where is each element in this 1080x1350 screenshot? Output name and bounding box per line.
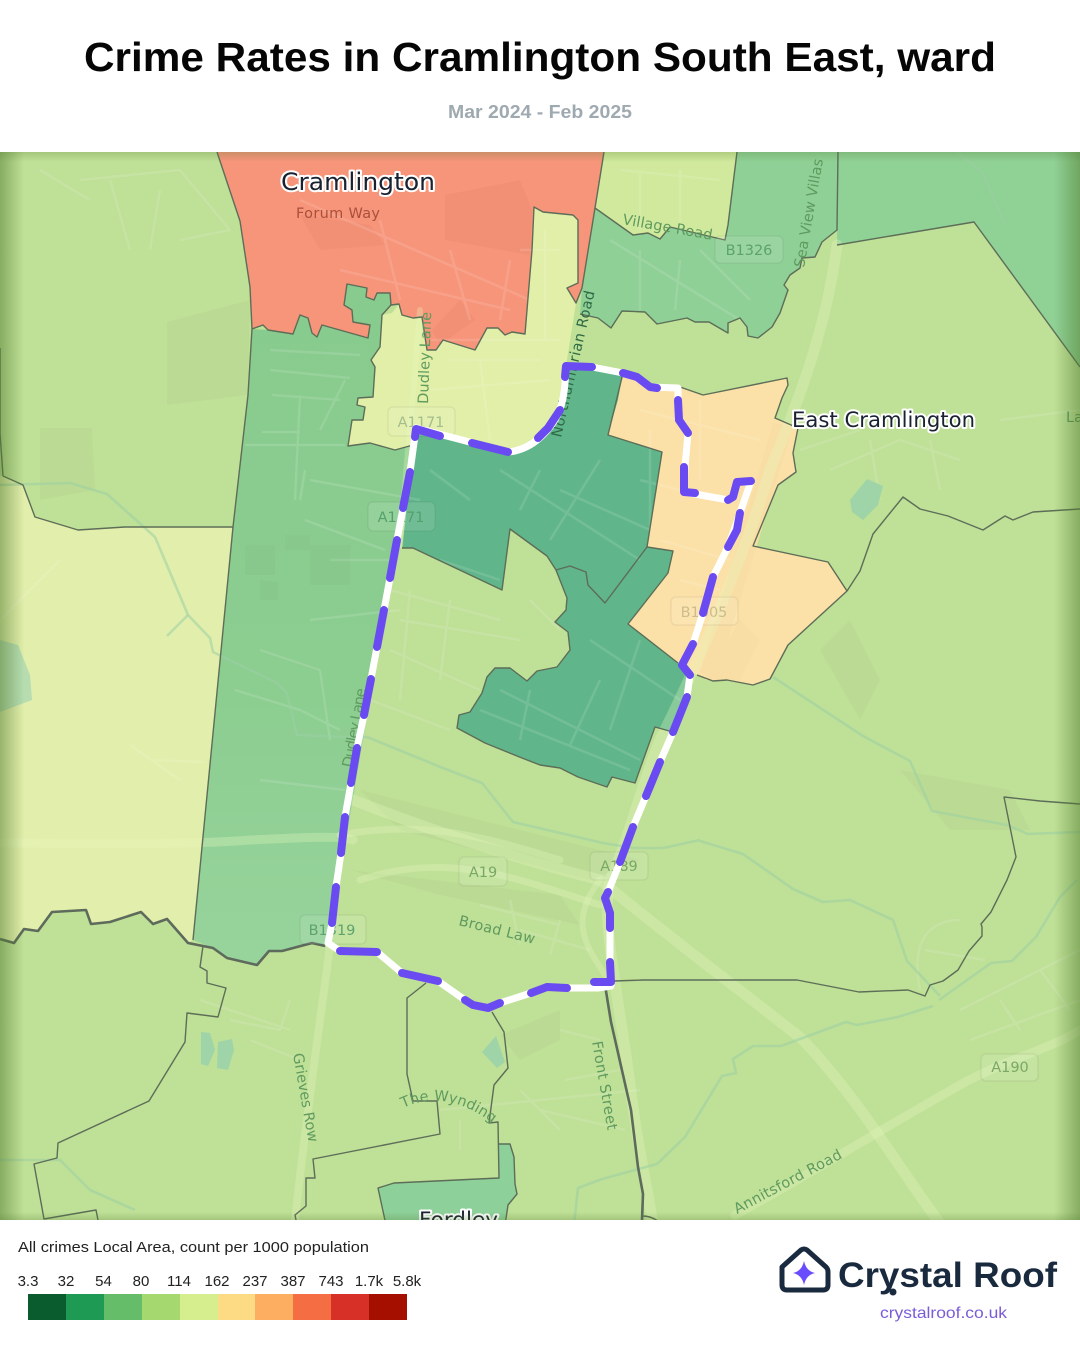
road shield labels: A1171 (378, 510, 424, 526)
road shield labels: B1326 (726, 243, 772, 259)
road names: Northumbrian Road (549, 289, 599, 439)
road shield labels: B1319 (309, 923, 355, 939)
road names: Forum Way (296, 206, 380, 222)
region: pale yellow west area (0, 476, 233, 943)
road names: Dudley Lane (416, 312, 435, 404)
footer panel (0, 1220, 1080, 1350)
legend tick labels: 114 (167, 1273, 191, 1290)
region: Cramlington red area (217, 152, 604, 350)
logo wordmark: Crystal Roof (838, 1256, 1057, 1295)
region: west green strip (193, 284, 416, 965)
legend colour scale (28, 1294, 407, 1320)
road shield labels: A1171 (398, 415, 444, 431)
legend tick labels: 162 (204, 1273, 230, 1290)
roads (202, 240, 1071, 1220)
legend (18, 1239, 422, 1320)
map edge vignette (0, 152, 1080, 1220)
region: ward interior dark green south (457, 547, 690, 787)
region: peach rail corridor (705, 518, 766, 682)
region: Dudley Lane yellow-green area (348, 207, 578, 452)
icon: house with star (782, 1249, 828, 1290)
road names: Front Street (588, 1040, 620, 1132)
road shield labels: B1005 (681, 605, 727, 621)
subtitle: date range: Mar 2024 - Feb 2025 (448, 101, 632, 122)
road names: The Wynding (399, 1090, 496, 1124)
road names: Dudley Lane (340, 687, 370, 769)
road names: Sea View Villas (792, 158, 827, 269)
legend tick labels: 3.3 (18, 1273, 38, 1290)
road names: Village Road (621, 212, 714, 244)
region: far north-east green area (837, 152, 1080, 367)
road shield labels: A190 (991, 1060, 1029, 1076)
region: peach East Cramlington area (608, 373, 847, 685)
logo: Crystal Roof (782, 1249, 1057, 1322)
place name: Cramlington: Cramlington (281, 168, 435, 196)
road shield labels (309, 243, 1029, 1076)
darker land patches (40, 300, 1030, 1060)
road names: Broad Law (457, 913, 537, 948)
region: north-east yellow-green area (595, 152, 737, 240)
website url: crystalroof.co.uk (880, 1305, 1008, 1322)
boundary: Front Street line (605, 985, 643, 1220)
ward boundary: white line (328, 366, 751, 1008)
legend tick labels: 54 (95, 1273, 112, 1290)
legend tick labels: 5.8k (393, 1273, 422, 1290)
road shield labels: A19 (469, 865, 497, 881)
logo key detail (890, 1288, 896, 1296)
legend tick labels (18, 1273, 422, 1290)
road names: Annitsford Road (731, 1147, 845, 1218)
legend tick labels: 387 (280, 1273, 306, 1290)
legend tick labels: 32 (58, 1273, 74, 1290)
legend tick labels: 743 (318, 1273, 344, 1290)
rivers (0, 482, 1080, 1220)
road shield labels: A189 (600, 859, 638, 875)
road names: Grieves Row (289, 1052, 320, 1143)
region: Fordley green area (378, 1144, 517, 1225)
minor streets (0, 170, 1080, 1150)
legend tick labels: 80 (133, 1273, 149, 1290)
road names (294, 160, 1080, 1214)
legend title: All crimes Local Area, count per 1000 population (18, 1239, 369, 1256)
choropleth map (0, 152, 1080, 1220)
legend tick labels: 1.7k (355, 1273, 384, 1290)
lakes and ponds (0, 479, 883, 1070)
area boundaries (0, 152, 1080, 1225)
region: ward interior dark green north (402, 366, 662, 603)
place name: Fordley: Fordley (419, 1208, 498, 1232)
ward boundary: purple dashes (332, 366, 751, 1008)
boundary: county river line (0, 910, 325, 965)
legend tick labels: 237 (242, 1273, 268, 1290)
region: Village Road green area (580, 152, 838, 338)
region: red area darker patches (300, 180, 532, 345)
road shields (300, 236, 1038, 1081)
title: Crime Rates in Cramlington South East, ward (84, 34, 996, 80)
place name: East Cramlington: East Cramlington (792, 408, 975, 432)
